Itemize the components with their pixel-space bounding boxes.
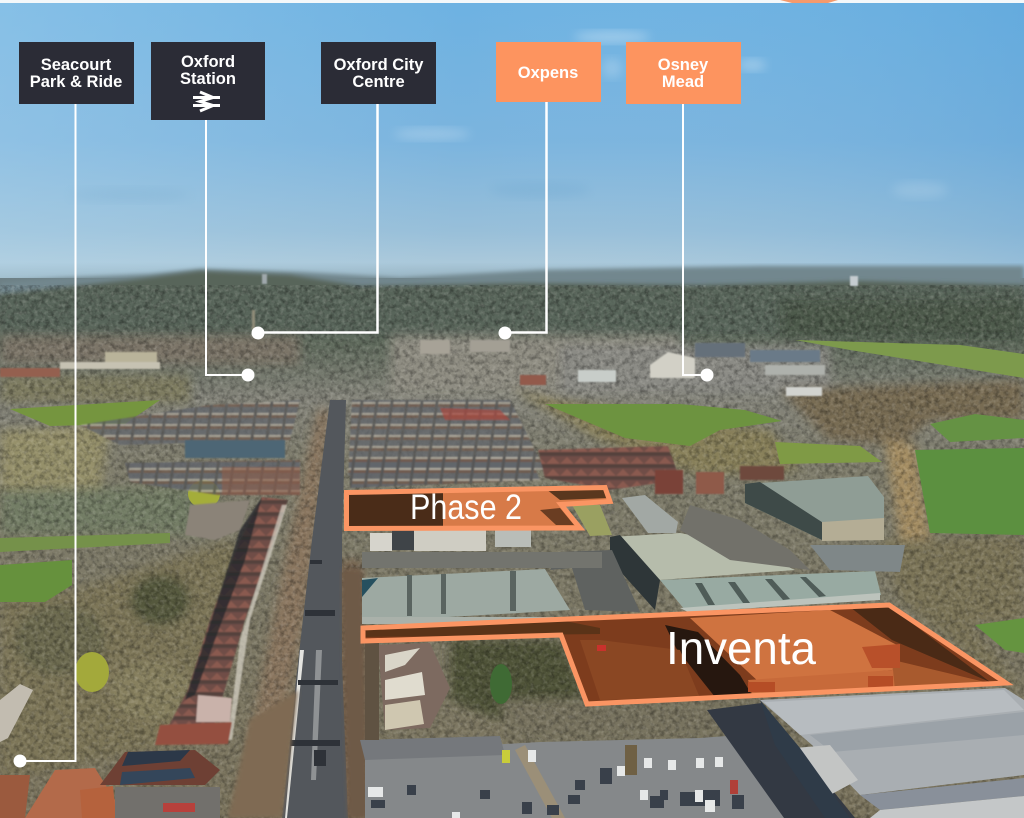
retail park roof — [760, 688, 1024, 818]
sky — [0, 0, 1024, 282]
green fields — [0, 340, 1024, 692]
label: Oxford Station: Oxford — [181, 53, 235, 71]
left residential terrace — [155, 497, 288, 745]
label: Oxford City Centre: Centre — [352, 73, 405, 91]
label: Oxford Station — [151, 42, 265, 120]
landscape base — [0, 266, 1024, 818]
site label: Phase 2: Phase 2 — [410, 488, 522, 527]
car park — [360, 703, 855, 818]
label: Oxford City Centre — [321, 42, 436, 104]
label: Osney Mead: Mead — [662, 73, 704, 91]
bottom left buildings — [0, 684, 220, 818]
label: Oxford Station: Station — [180, 70, 236, 88]
leader line: Seacourt Park & Ride — [14, 104, 76, 768]
label: Oxford City Centre: Oxford City — [334, 56, 424, 74]
site label: Inventa: Inventa — [666, 622, 816, 674]
small houses between road and site — [365, 640, 512, 740]
site outline: Inventa — [363, 605, 1006, 704]
leader line: Osney Mead — [683, 104, 714, 382]
label: Seacourt Park & Ride — [19, 42, 134, 104]
label: Osney Mead: Osney — [658, 56, 709, 74]
industrial estate — [362, 476, 905, 624]
town texture — [0, 285, 1024, 818]
label: Seacourt Park & Ride: Park & Ride — [30, 73, 122, 91]
vegetation and town tones — [0, 300, 1024, 818]
terraced housing — [80, 400, 784, 540]
leader line: Oxpens — [498, 102, 546, 340]
icon: National Rail symbol — [193, 92, 220, 111]
label: Oxpens: Oxpens — [518, 64, 578, 82]
leader line: Oxford City Centre — [252, 104, 378, 340]
main road — [228, 400, 368, 818]
town buildings — [0, 274, 858, 396]
label: Seacourt Park & Ride: Seacourt — [41, 56, 112, 74]
label: Oxpens — [496, 42, 601, 102]
site outline: Phase 2 — [346, 487, 610, 529]
label: Osney Mead — [626, 42, 741, 104]
leader line: Oxford Station — [206, 120, 254, 382]
